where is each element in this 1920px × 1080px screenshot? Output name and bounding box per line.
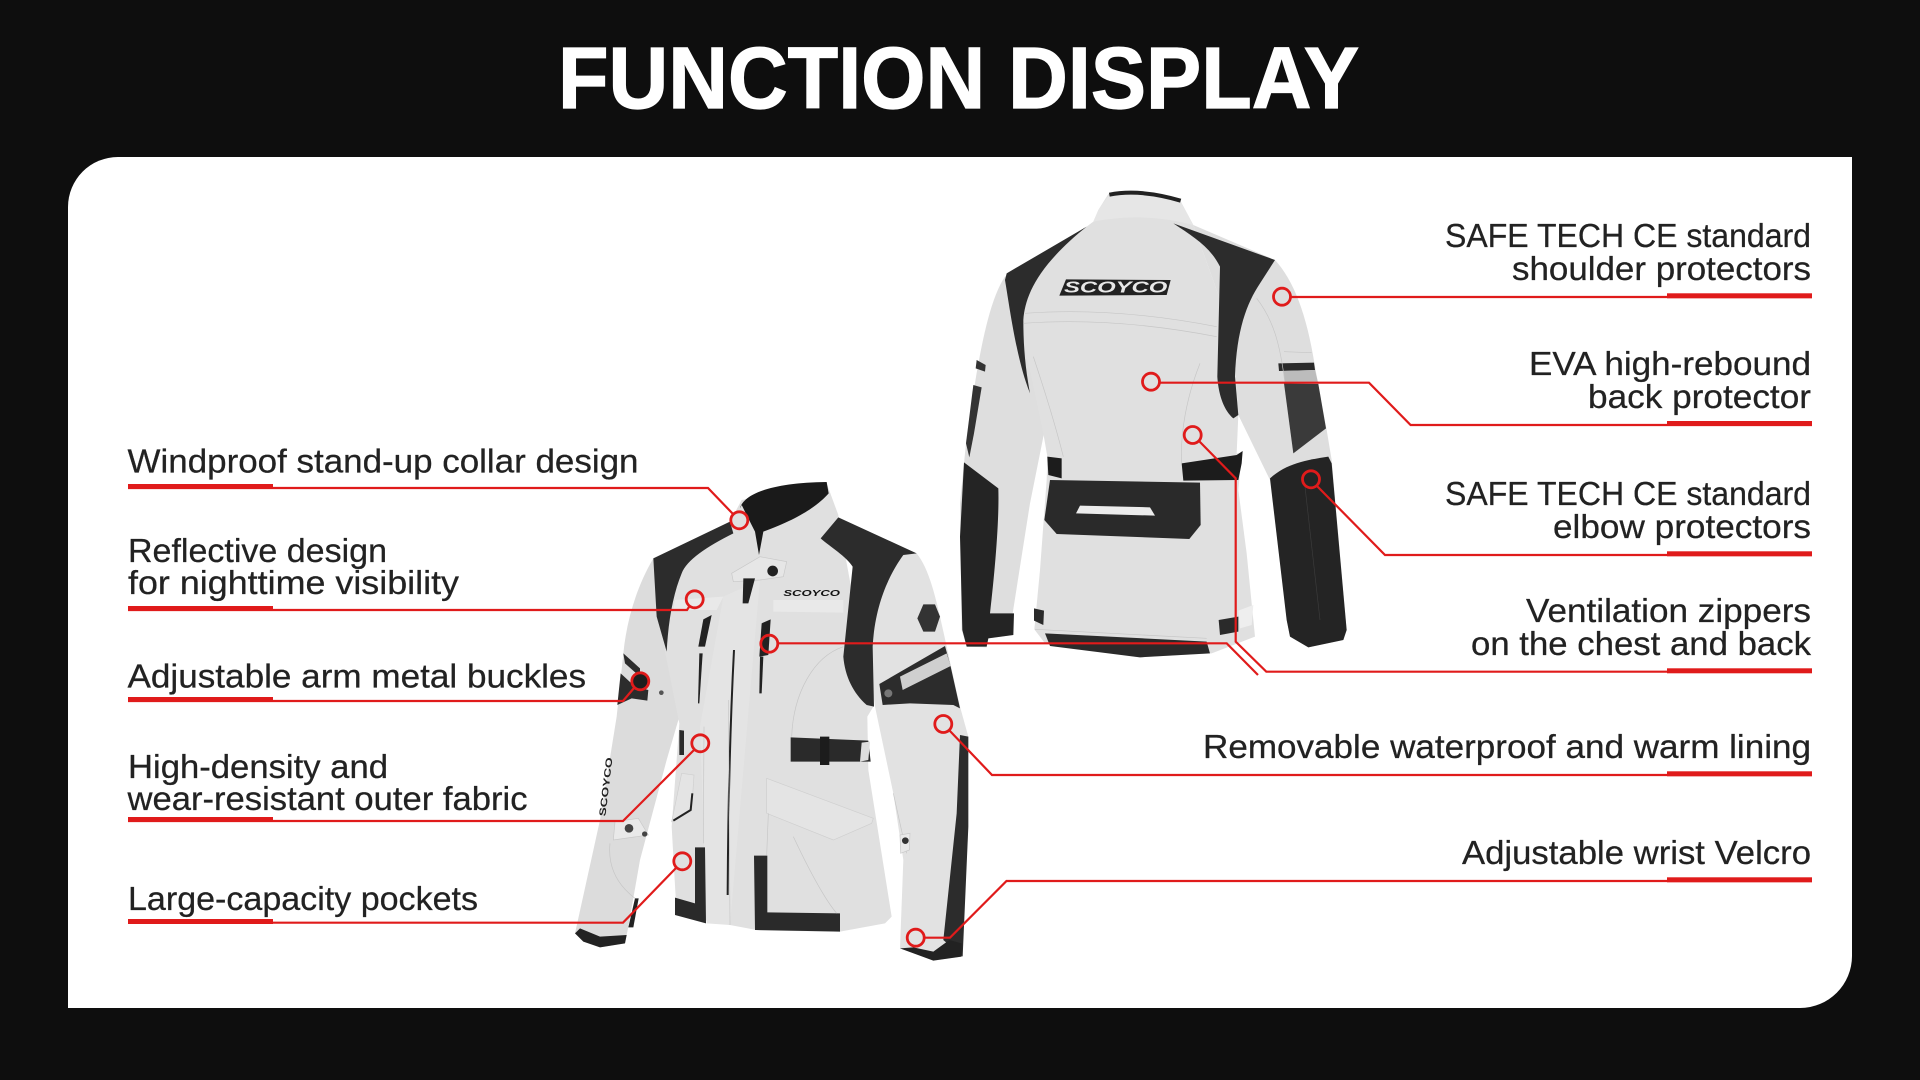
front jacket: large pocket flap	[767, 778, 873, 840]
back jacket: left sleeve	[960, 227, 1087, 647]
callout: ventilation zippers	[761, 426, 1812, 675]
back jacket: waist panel with reflector	[1044, 480, 1201, 539]
callout: arm metal buckles	[128, 658, 649, 702]
back jacket: waist strap	[1047, 451, 1243, 481]
back jacket: right forearm panel	[1270, 457, 1347, 647]
front jacket: torso	[653, 483, 892, 932]
front jacket: left sleeve panels	[617, 653, 648, 705]
back jacket: left forearm panel	[960, 462, 1014, 647]
front jacket: reflective chest band	[673, 597, 843, 613]
callout: shoulder protectors	[1274, 217, 1812, 305]
back jacket: right sleeve	[1193, 225, 1347, 647]
front jacket: right sleeve panels	[879, 646, 960, 708]
callout: ventilation zippers: Ventilation zippers	[1526, 592, 1811, 629]
callout: back protector: EVA high-rebound	[1529, 345, 1811, 382]
callout: elbow protectors: SAFE TECH CE standard	[1445, 475, 1811, 512]
front jacket: right sleeve	[838, 518, 968, 961]
back jacket: hem and side tabs	[1034, 605, 1253, 657]
front jacket: left cuff	[575, 898, 639, 947]
front view jacket	[575, 482, 968, 961]
callout: windproof collar	[128, 442, 748, 529]
front jacket: left sleeve	[575, 522, 730, 947]
title: FUNCTION DISPLAY	[558, 30, 1359, 127]
callout: outer fabric: wear-resistant outer fabric	[126, 780, 527, 817]
white panel	[68, 157, 1852, 1008]
back jacket: right upper sleeve panels	[1278, 363, 1326, 453]
back jacket: SCOYCO logo: SCOYCO	[1064, 280, 1167, 297]
front jacket: right shoulder panel	[821, 517, 917, 707]
front jacket: zippers	[698, 578, 771, 703]
callout: outer fabric	[126, 735, 709, 822]
front jacket: waist belt	[679, 730, 871, 765]
front jacket: right cuff	[900, 940, 962, 961]
callout: back protector: back protector	[1588, 378, 1811, 415]
front jacket: right forearm stripe	[943, 735, 968, 957]
back jacket: left shoulder panel	[1005, 227, 1087, 393]
front jacket: left sleeve logo: SCOYCO	[597, 757, 615, 817]
callout: outer fabric: High-density and	[128, 748, 388, 785]
front jacket: left sleeve strap and snaps	[613, 690, 664, 840]
front jacket: hem color blocks	[675, 847, 840, 932]
back jacket: left sleeve stripes	[966, 360, 986, 457]
callout: elbow protectors	[1302, 471, 1812, 556]
callout: arm metal buckles: Adjustable arm metal buckles	[128, 658, 586, 694]
callout: shoulder protectors: shoulder protectors	[1512, 250, 1811, 287]
right callouts	[761, 217, 1812, 946]
callout: pockets	[128, 853, 691, 924]
back jacket: SCOYCO logo	[1059, 279, 1171, 297]
back jacket: right shoulder panel	[1173, 223, 1275, 418]
back jacket: collar	[1093, 193, 1193, 225]
front jacket: right sleeve snap tab	[900, 833, 910, 853]
callout: reflective design: Reflective design	[128, 532, 387, 569]
callout: wrist velcro	[907, 834, 1812, 946]
front jacket: placket highlight	[700, 580, 760, 925]
callout: windproof collar: Windproof stand-up collar design	[128, 442, 638, 480]
back jacket: torso	[1007, 192, 1255, 657]
back view jacket	[960, 192, 1347, 657]
front jacket: center zipper	[728, 650, 734, 895]
front jacket: collar lining	[740, 482, 829, 555]
callout: back protector	[1142, 345, 1812, 426]
front jacket: chest logo: SCOYCO	[783, 588, 840, 598]
callout: removable lining: Removable waterproof and warm lining	[1203, 728, 1811, 765]
front jacket: collar tab with snap	[732, 557, 787, 582]
callout: pockets: Large-capacity pockets	[128, 880, 478, 917]
callout: removable lining	[935, 716, 1812, 776]
front jacket: left shoulder panel	[653, 522, 733, 652]
front jacket: sleeve badge	[917, 604, 940, 632]
front jacket: seams	[610, 647, 907, 925]
callout: wrist velcro: Adjustable wrist Velcro	[1462, 834, 1811, 871]
callout: elbow protectors: elbow protectors	[1553, 508, 1811, 545]
back jacket: seams	[1023, 298, 1320, 638]
callout: reflective design	[128, 532, 703, 611]
callout: shoulder protectors: SAFE TECH CE standard	[1445, 217, 1811, 254]
callout: reflective design: for nighttime visibility	[128, 564, 460, 601]
callout: ventilation zippers: on the chest and back	[1471, 625, 1812, 662]
front jacket: small left pocket	[672, 773, 694, 822]
left callouts	[126, 442, 748, 924]
